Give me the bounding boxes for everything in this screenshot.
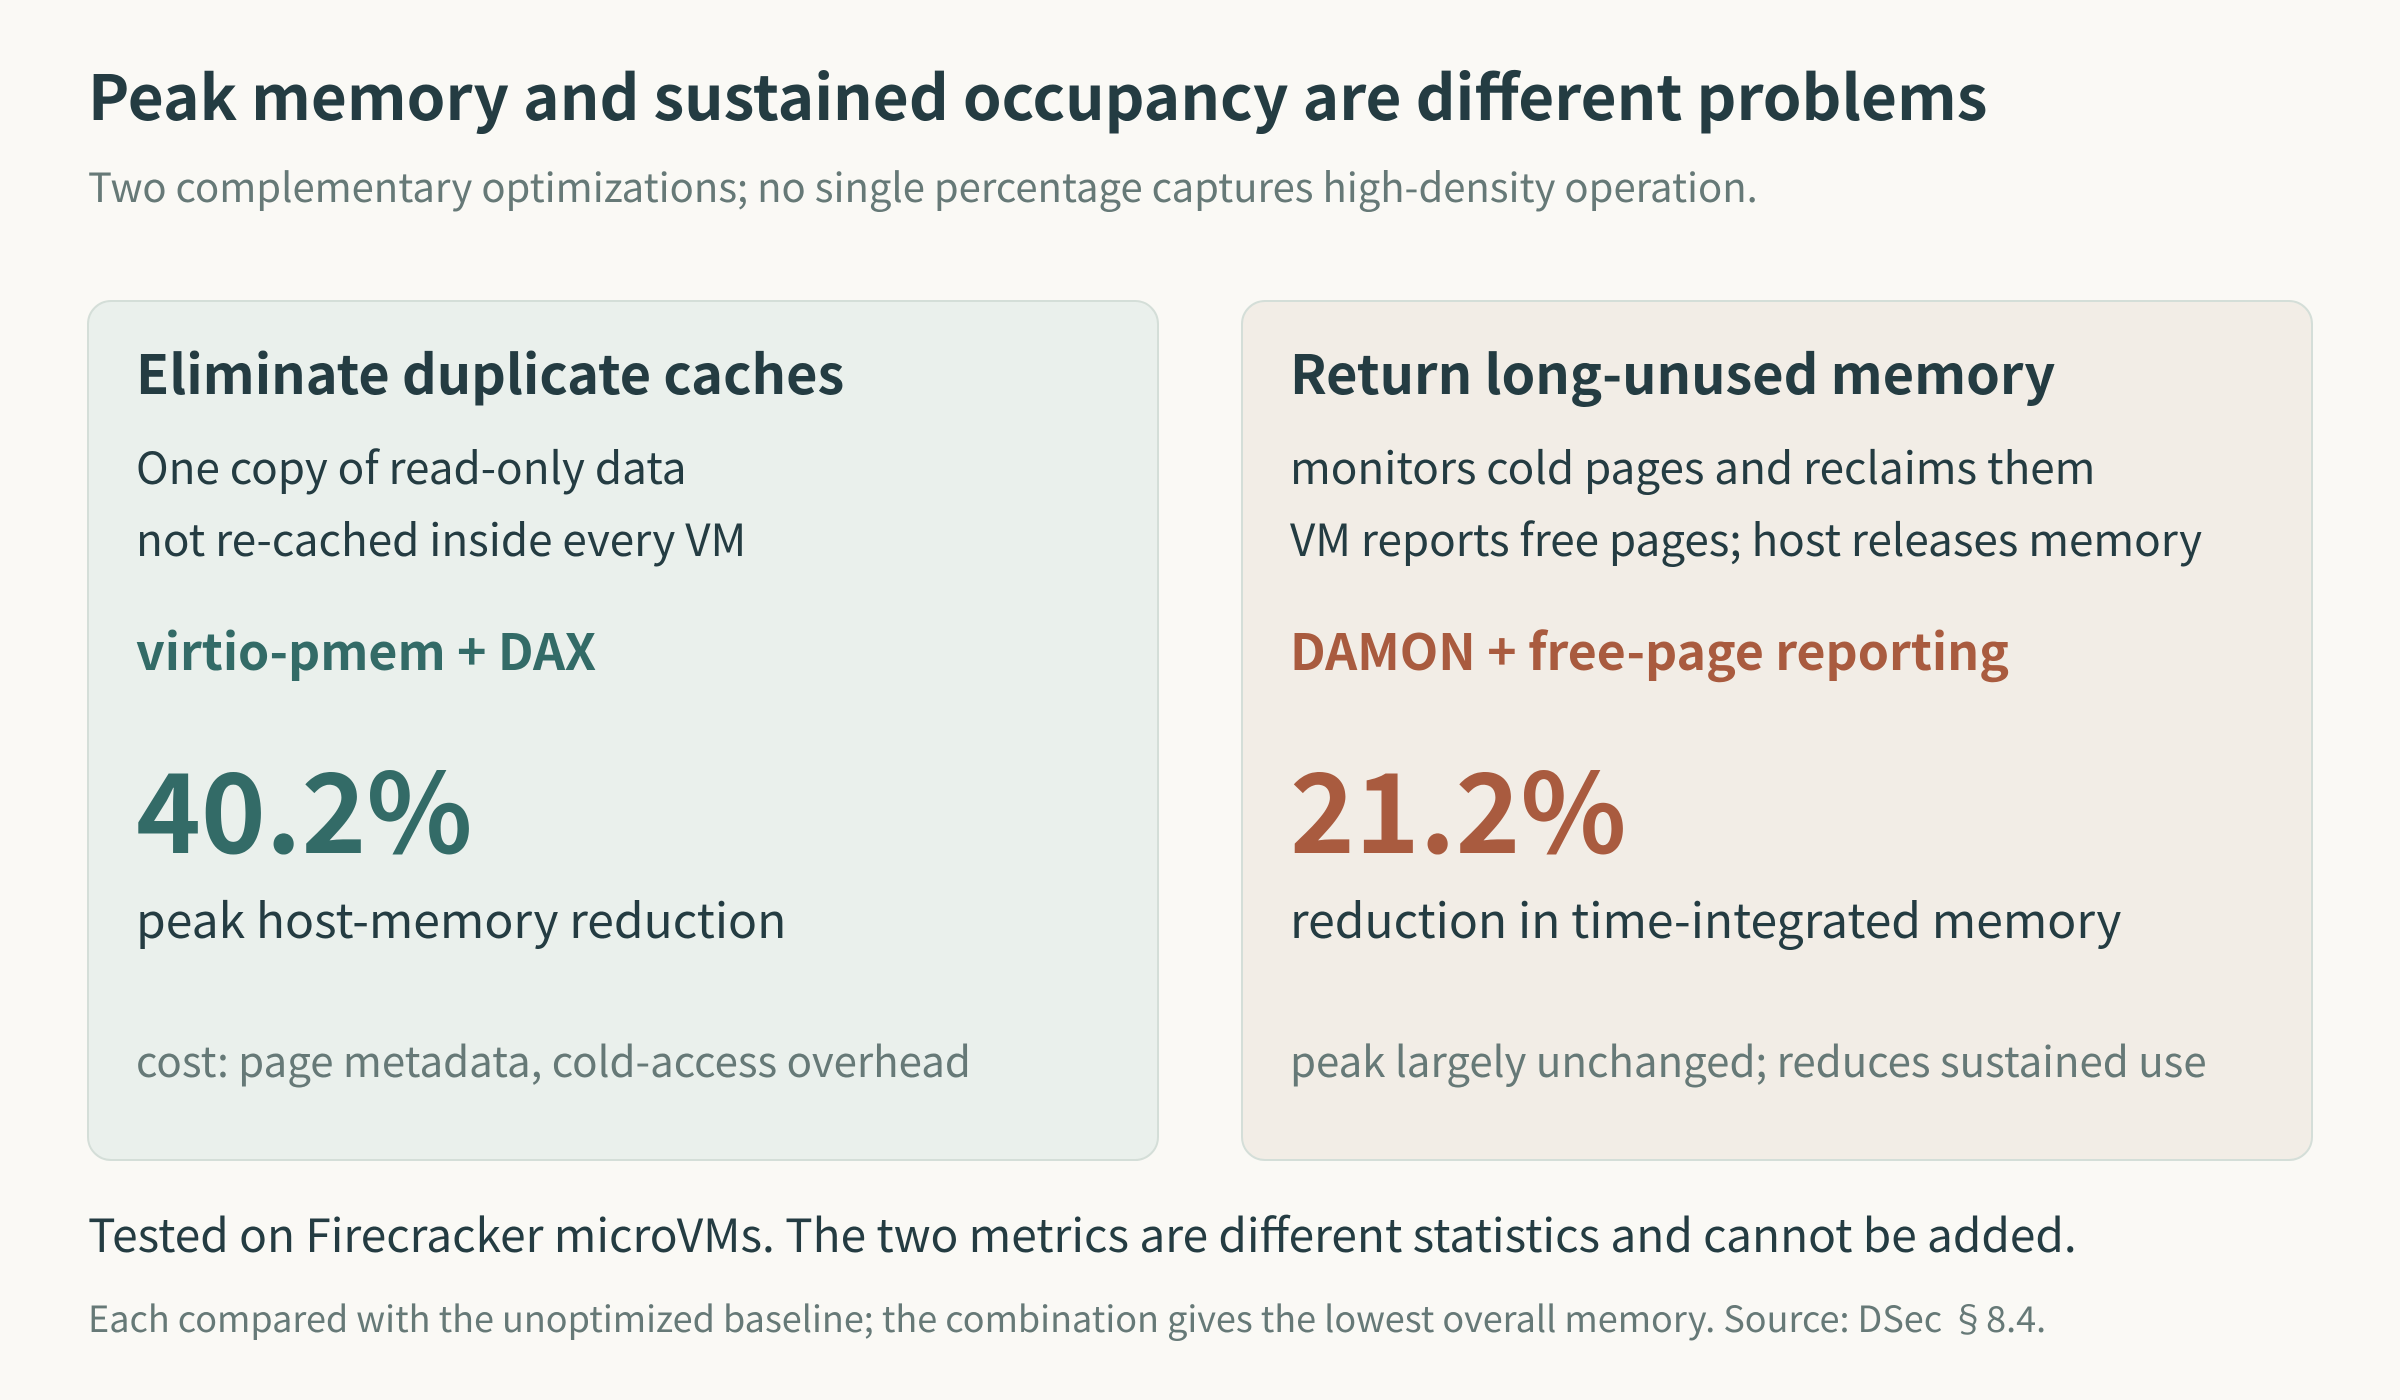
tradeoff note: peak largely unchanged; reduces sustained use: [1290, 1029, 2207, 1090]
description line 2: VM reports free pages; host releases memory: [1290, 505, 2202, 569]
subtitle: Two complementary optimizations; no single percentage captures high-density operation.: [88, 156, 1758, 214]
panel heading: Eliminate duplicate caches: [136, 331, 844, 410]
metric description: peak host-memory reduction: [136, 882, 786, 952]
big number: 40.2%: [136, 725, 472, 885]
panel heading: Return long-unused memory: [1290, 331, 2055, 410]
technique name: DAMON + free-page reporting: [1290, 613, 2009, 685]
description line 1: monitors cold pages and reclaims them: [1290, 433, 2095, 497]
takeaway: Tested on Firecracker microVMs. The two metrics are different statistics and cannot be added.: [88, 1200, 2077, 1266]
description line 1: One copy of read-only data: [136, 433, 687, 497]
panel: return long-unused memory: [1241, 300, 2313, 1161]
source note: Each compared with the unoptimized baseline; the combination gives the lowest overall memory. Source: DSec §8.4.: [88, 1291, 2046, 1343]
metric description: reduction in time-integrated memory: [1290, 882, 2121, 952]
description line 2: not re-cached inside every VM: [136, 505, 746, 569]
title: Peak memory and sustained occupancy are different problems: [88, 48, 1988, 138]
technique name: virtio-pmem + DAX: [136, 613, 596, 685]
panel: eliminate duplicate caches: [87, 300, 1159, 1161]
big number: 21.2%: [1290, 725, 1626, 885]
cost note: cost: page metadata, cold-access overhead: [136, 1029, 971, 1090]
